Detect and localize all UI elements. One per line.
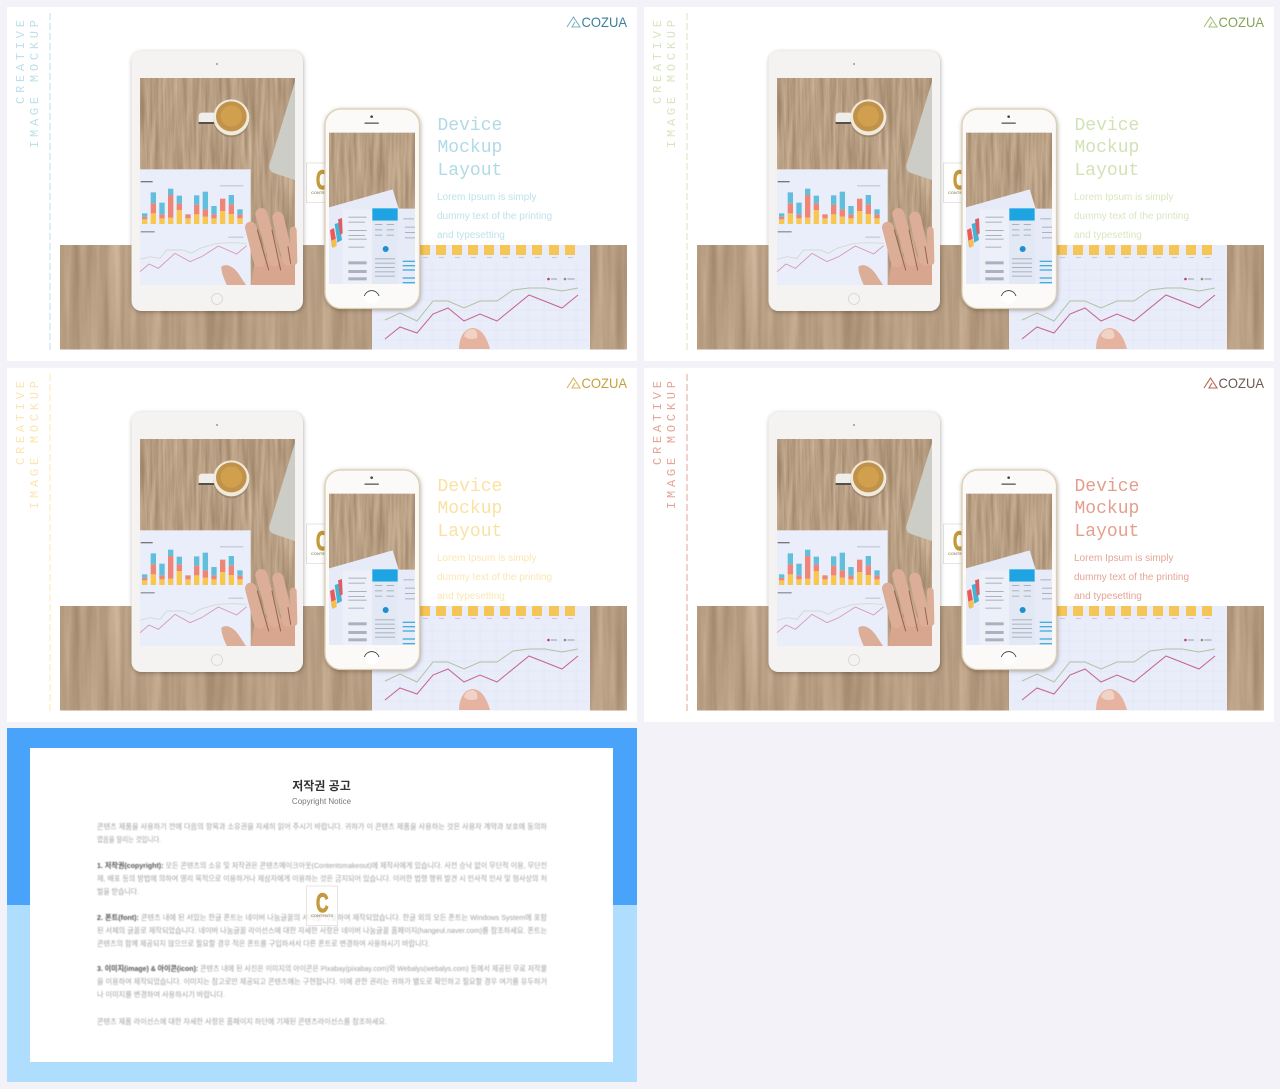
- panel: yellow slide: [7, 368, 637, 722]
- phone mockup: [962, 470, 1056, 670]
- photo band: wood: [697, 245, 1264, 350]
- vertical caption: CREATIVE: [651, 20, 665, 104]
- vertical caption: IMAGE MOCKUP: [28, 20, 42, 148]
- dashed divider: [49, 374, 51, 711]
- intro paragraph: [97, 821, 547, 844]
- line chart paper: [1009, 245, 1227, 350]
- vertical caption: CREATIVE: [14, 381, 28, 465]
- tablet mockup: [768, 412, 940, 672]
- vertical caption: [651, 381, 679, 509]
- tablet mockup: [768, 51, 940, 311]
- panel: copyright notice: [7, 728, 637, 1082]
- intro paragraph: 였음을 알리는 것입니다.: [97, 834, 161, 844]
- clause 2: font: 콘텐츠의 함께 제공되지 않으므로 필요할 경우 적은 폰트를 구입하셔서 다른 폰트로 변경하여 사용하시기 바랍니다.: [97, 938, 430, 948]
- panel: green slide: [644, 7, 1274, 361]
- clause 1: copyright: 1. 저작권(copyright): 모든 콘텐츠의 소유 및 저작권은 콘텐츠메이크아웃(Contentsmakeout)에 제작사에게 있습니다. 사전 승낙 없이 무단적 이용, 무단전: [97, 860, 547, 870]
- clause 1: copyright: 벌을 받습니다.: [97, 886, 139, 896]
- clause 2: font: 된 서체의 글꼴로 제작되었습니다. 네이버 나눔글꼴 라이선스에 대한 자세한 사항은 네이버 나눔글꼴 홈페이지(hangeul.naver.com)를 참조하세요. 폰트는: [97, 925, 547, 935]
- line chart paper: [372, 606, 590, 710]
- notice title: 저작권 공고: [292, 778, 351, 793]
- vertical caption: [14, 20, 42, 148]
- dashed divider: [686, 374, 688, 711]
- clause 3: image and icon: [97, 963, 547, 999]
- body text: dummy text of the printing: [437, 572, 552, 583]
- clause 2: font: 2. 폰트(font): 콘텐츠 내에 된 서있는 한글 폰트는 네이버 나눔글꼴의 서체를 사용하여 제작되었습니다. 한글 외의 모든 폰트는 Windows System에 포함: [97, 912, 547, 922]
- body text: Lorem Ipsum is simply: [437, 553, 536, 564]
- body text: and typesetting: [1074, 591, 1142, 602]
- heading: Layout: [1074, 161, 1139, 181]
- COZUA logo: COZUA: [582, 14, 628, 30]
- heading: Mockup: [438, 138, 502, 158]
- gold C logo box: [306, 163, 338, 202]
- photo band: wood: [60, 245, 627, 350]
- panel: blue slide: [7, 7, 637, 361]
- clause 3: image and icon: 3. 이미지(image) & 아이콘(icon): 콘텐츠 내에 된 사진은 이미지의 아이콘은 Pixabay(pixabay.com)와 Webalys(webalys.com) 등에서 제공된 무료 저작물: [97, 963, 547, 973]
- closing line: 콘텐츠 제품 라이선스에 대한 자세한 사항은 홈페이지 하단에 기재된 콘텐츠라이선스를 참조하세요.: [97, 1016, 387, 1026]
- heading: Device: [1074, 477, 1139, 497]
- tablet mockup: [132, 51, 303, 311]
- body text: Lorem Ipsum is simply: [437, 192, 536, 203]
- dashed divider: [686, 13, 688, 350]
- clause 3: image and icon: 나 이미지를 변경하여 사용하시기 바랍니다.: [97, 989, 225, 999]
- COZUA logo: COZUA: [582, 375, 628, 391]
- photo band: wood: [60, 606, 627, 710]
- phone mockup: [325, 109, 420, 308]
- gold C logo box: [306, 886, 338, 926]
- vertical caption: [651, 20, 679, 148]
- heading: Device: [438, 477, 502, 497]
- photo band: wood: [697, 606, 1264, 710]
- gold C logo box: [944, 524, 974, 564]
- heading: Mockup: [1074, 499, 1139, 519]
- vertical caption: IMAGE MOCKUP: [665, 20, 679, 148]
- heading: Mockup: [438, 499, 502, 519]
- line chart paper: [1009, 606, 1227, 710]
- panel: salmon slide: [644, 368, 1274, 722]
- clause 3: image and icon: 을 이용하여 제작되었습니다. 이미지는 참고로만 제공되고 콘텐츠에는 구현합니다. 이에 관한 권리는 귀하가 별도로 확인하고 필요할 경우 여기를 유두하거: [97, 976, 547, 986]
- body text: and typesetting: [437, 591, 505, 602]
- heading: Mockup: [1074, 138, 1139, 158]
- body text: and typesetting: [437, 230, 505, 241]
- notice subtitle: Copyright Notice: [292, 797, 352, 806]
- heading: Device: [438, 116, 502, 136]
- phone mockup: [325, 470, 420, 670]
- heading: Device: [1074, 116, 1139, 136]
- COZUA logo: COZUA: [1218, 14, 1265, 30]
- heading: Layout: [438, 522, 502, 542]
- vertical caption: CREATIVE: [14, 20, 28, 104]
- vertical caption: [14, 381, 42, 509]
- clause 1: copyright: [97, 860, 547, 896]
- dashed divider: [49, 13, 51, 350]
- intro paragraph: 콘텐츠 제품을 사용하기 전에 다음의 항목과 소유권을 자세히 읽어 주시기 바랍니다. 귀하가 이 콘텐츠 제품을 사용하는 것은 사용자 계약과 보호에 동의하: [97, 821, 547, 831]
- tablet mockup: [132, 412, 303, 672]
- body text: dummy text of the printing: [1074, 572, 1189, 583]
- body text: Lorem Ipsum is simply: [1074, 192, 1173, 203]
- body text: dummy text of the printing: [437, 211, 552, 222]
- phone mockup: [962, 109, 1056, 308]
- vertical caption: IMAGE MOCKUP: [665, 381, 679, 509]
- gold C logo box: [306, 524, 338, 564]
- body text: dummy text of the printing: [1074, 211, 1189, 222]
- vertical caption: IMAGE MOCKUP: [28, 381, 42, 509]
- vertical caption: CREATIVE: [651, 381, 665, 465]
- body text: Lorem Ipsum is simply: [1074, 553, 1173, 564]
- heading: Layout: [438, 161, 502, 181]
- heading: Layout: [1074, 522, 1139, 542]
- gold C logo box: [944, 163, 974, 202]
- clause 1: copyright: 재, 배포 등의 방법에 의하여 영리 목적으로 이용하거나 제삼자에게 이용하는 것은 금지되어 있습니다. 이러한 법령 행위 발견 시 민사적 민사 및 형사상의 처: [97, 873, 547, 883]
- clause 2: font: [97, 912, 547, 948]
- body text: and typesetting: [1074, 230, 1142, 241]
- COZUA logo: COZUA: [1218, 375, 1265, 391]
- line chart paper: [372, 245, 590, 350]
